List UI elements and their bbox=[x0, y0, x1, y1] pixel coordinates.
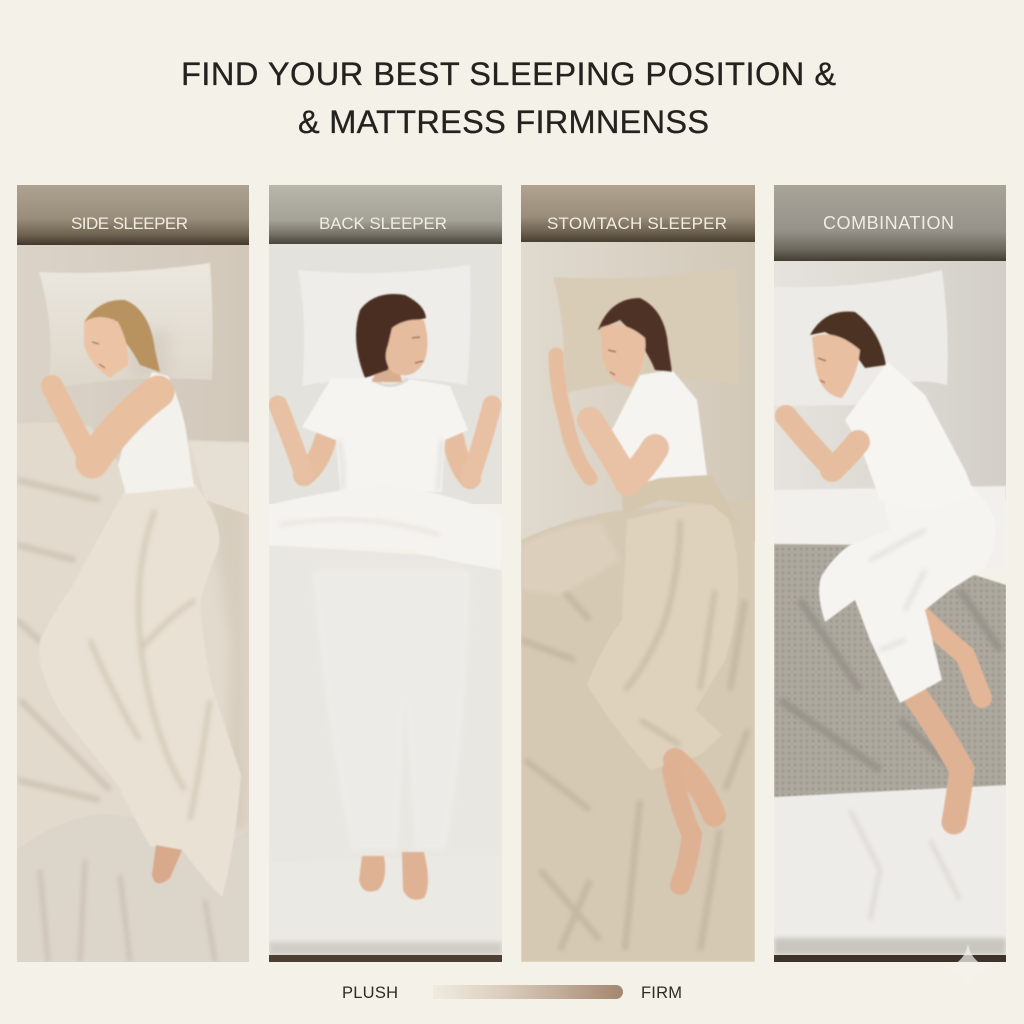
header band bbox=[17, 185, 249, 245]
label: combination: COMBINATION bbox=[823, 213, 954, 233]
label: side sleeper: SIDE SLEEPER bbox=[71, 214, 188, 233]
panel: stomach sleeper bbox=[521, 185, 755, 962]
label: stomach sleeper: STOMTACH SLEEPER bbox=[547, 214, 727, 233]
bottom sheet bbox=[774, 808, 1006, 962]
feet bbox=[359, 852, 428, 900]
sleeper figure: stomach bbox=[556, 298, 742, 885]
mattress base bbox=[269, 939, 502, 962]
panel: side sleeper bbox=[17, 185, 249, 962]
pillow bbox=[298, 265, 471, 386]
firmness scale bbox=[342, 984, 682, 1002]
pillow bbox=[553, 276, 683, 392]
blanket bbox=[17, 422, 249, 850]
label: firm: FIRM bbox=[641, 984, 682, 1002]
mattress bottom sheet bbox=[38, 817, 249, 962]
knit blanket bbox=[269, 545, 502, 862]
label: plush: PLUSH bbox=[342, 984, 398, 1002]
icon: sparkle watermark bbox=[944, 944, 992, 992]
beige sheet bbox=[521, 500, 755, 962]
label: back sleeper: BACK SLEEPER bbox=[319, 214, 447, 233]
title: & MATTRESS FIRMNENSS bbox=[298, 104, 709, 140]
header band bbox=[269, 185, 502, 244]
header band bbox=[521, 185, 755, 242]
pillow bbox=[774, 270, 948, 406]
sleeper figure: combination bbox=[786, 311, 996, 822]
header band bbox=[774, 185, 1006, 261]
sleeper figure: back bbox=[278, 294, 492, 492]
sleeper figure: side bbox=[39, 300, 241, 897]
title bbox=[181, 56, 836, 140]
panel: back sleeper bbox=[269, 185, 502, 962]
title: FIND YOUR BEST SLEEPING POSITION & bbox=[181, 56, 836, 92]
gradient bar bbox=[433, 985, 623, 999]
grey knit blanket bbox=[774, 544, 1006, 797]
panel: combination bbox=[774, 185, 1006, 962]
white duvet bbox=[774, 486, 1006, 501]
pillow bbox=[39, 263, 213, 390]
folded duvet bbox=[269, 485, 502, 570]
